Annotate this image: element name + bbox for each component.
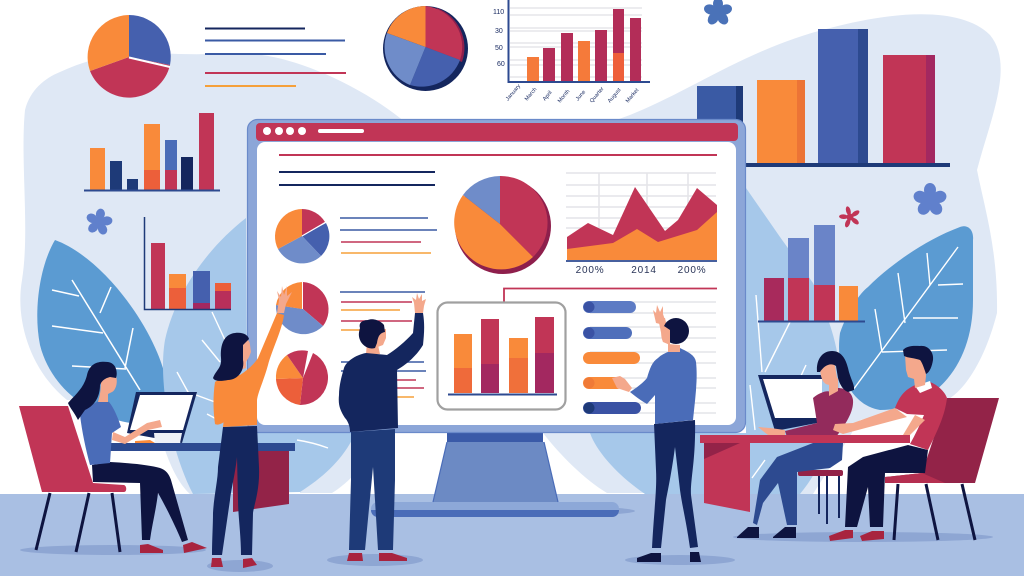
axis labels: Quarter	[589, 86, 606, 104]
axis labels: Market	[625, 87, 641, 104]
axis labels: 30	[495, 28, 503, 35]
man standing, blue sweater	[612, 305, 735, 565]
stool	[798, 470, 843, 524]
axis labels: 200%	[576, 265, 604, 276]
right shelf bar chart	[758, 225, 865, 322]
top-right big bar chart	[690, 29, 950, 167]
axis labels: 2014	[631, 265, 657, 276]
body	[68, 362, 207, 553]
big pie chart	[454, 176, 551, 274]
left leaf	[37, 240, 168, 423]
axis labels: 110	[493, 9, 504, 16]
axis labels: August	[607, 87, 623, 104]
axis labels	[493, 9, 641, 104]
axis labels: January	[505, 83, 522, 102]
axis labels: 60	[497, 61, 505, 68]
axis labels: 200%	[678, 265, 706, 276]
right desk top	[700, 435, 910, 443]
decorative flower: blue top	[703, 0, 733, 27]
axis labels: Month	[557, 89, 571, 104]
man seated at right desk	[829, 346, 999, 541]
axis labels: June	[575, 89, 587, 102]
floor	[0, 494, 1024, 576]
top text lines	[205, 28, 346, 86]
woman standing, orange top	[207, 286, 292, 572]
shadow	[20, 545, 206, 555]
monitor stand	[371, 433, 635, 517]
right desk	[704, 443, 750, 512]
chair	[885, 398, 999, 540]
pill bar list	[583, 301, 716, 414]
connector line	[504, 288, 717, 302]
laptop	[127, 392, 197, 443]
woman seated at left desk	[19, 362, 295, 555]
text lines 2	[340, 292, 426, 397]
decorative flower: blue left	[85, 208, 113, 236]
screen	[257, 142, 736, 425]
background blobs	[20, 14, 1001, 494]
decorative flower: red	[839, 206, 860, 228]
axis labels: April	[542, 90, 554, 102]
chair	[19, 406, 126, 552]
small pie chart 1	[275, 209, 329, 263]
background veins	[177, 295, 806, 478]
axis labels: 50	[495, 45, 503, 52]
right leaf	[839, 226, 973, 410]
top-centre pie chart	[383, 6, 468, 91]
right laptop	[758, 375, 822, 431]
axis labels: March	[524, 87, 538, 102]
top bar chart	[493, 0, 650, 104]
callout bar chart	[438, 302, 566, 410]
area chart	[566, 173, 717, 276]
left lower bar chart	[144, 217, 231, 310]
small pie chart 3	[276, 350, 328, 405]
browser title bar	[256, 123, 738, 141]
screen heading lines	[279, 155, 717, 185]
light blue shapes behind the monitor	[163, 188, 840, 494]
text lines 1	[340, 218, 437, 253]
man standing, navy sweater	[327, 293, 426, 566]
desk	[109, 443, 295, 512]
small pie chart 2	[276, 282, 329, 334]
monitor	[248, 120, 746, 432]
decorative flower: blue right	[912, 183, 948, 217]
woman seated at right desk	[733, 351, 993, 542]
left upper bar chart	[84, 113, 220, 190]
top-left pie chart	[88, 15, 171, 98]
axis labels	[576, 265, 706, 276]
